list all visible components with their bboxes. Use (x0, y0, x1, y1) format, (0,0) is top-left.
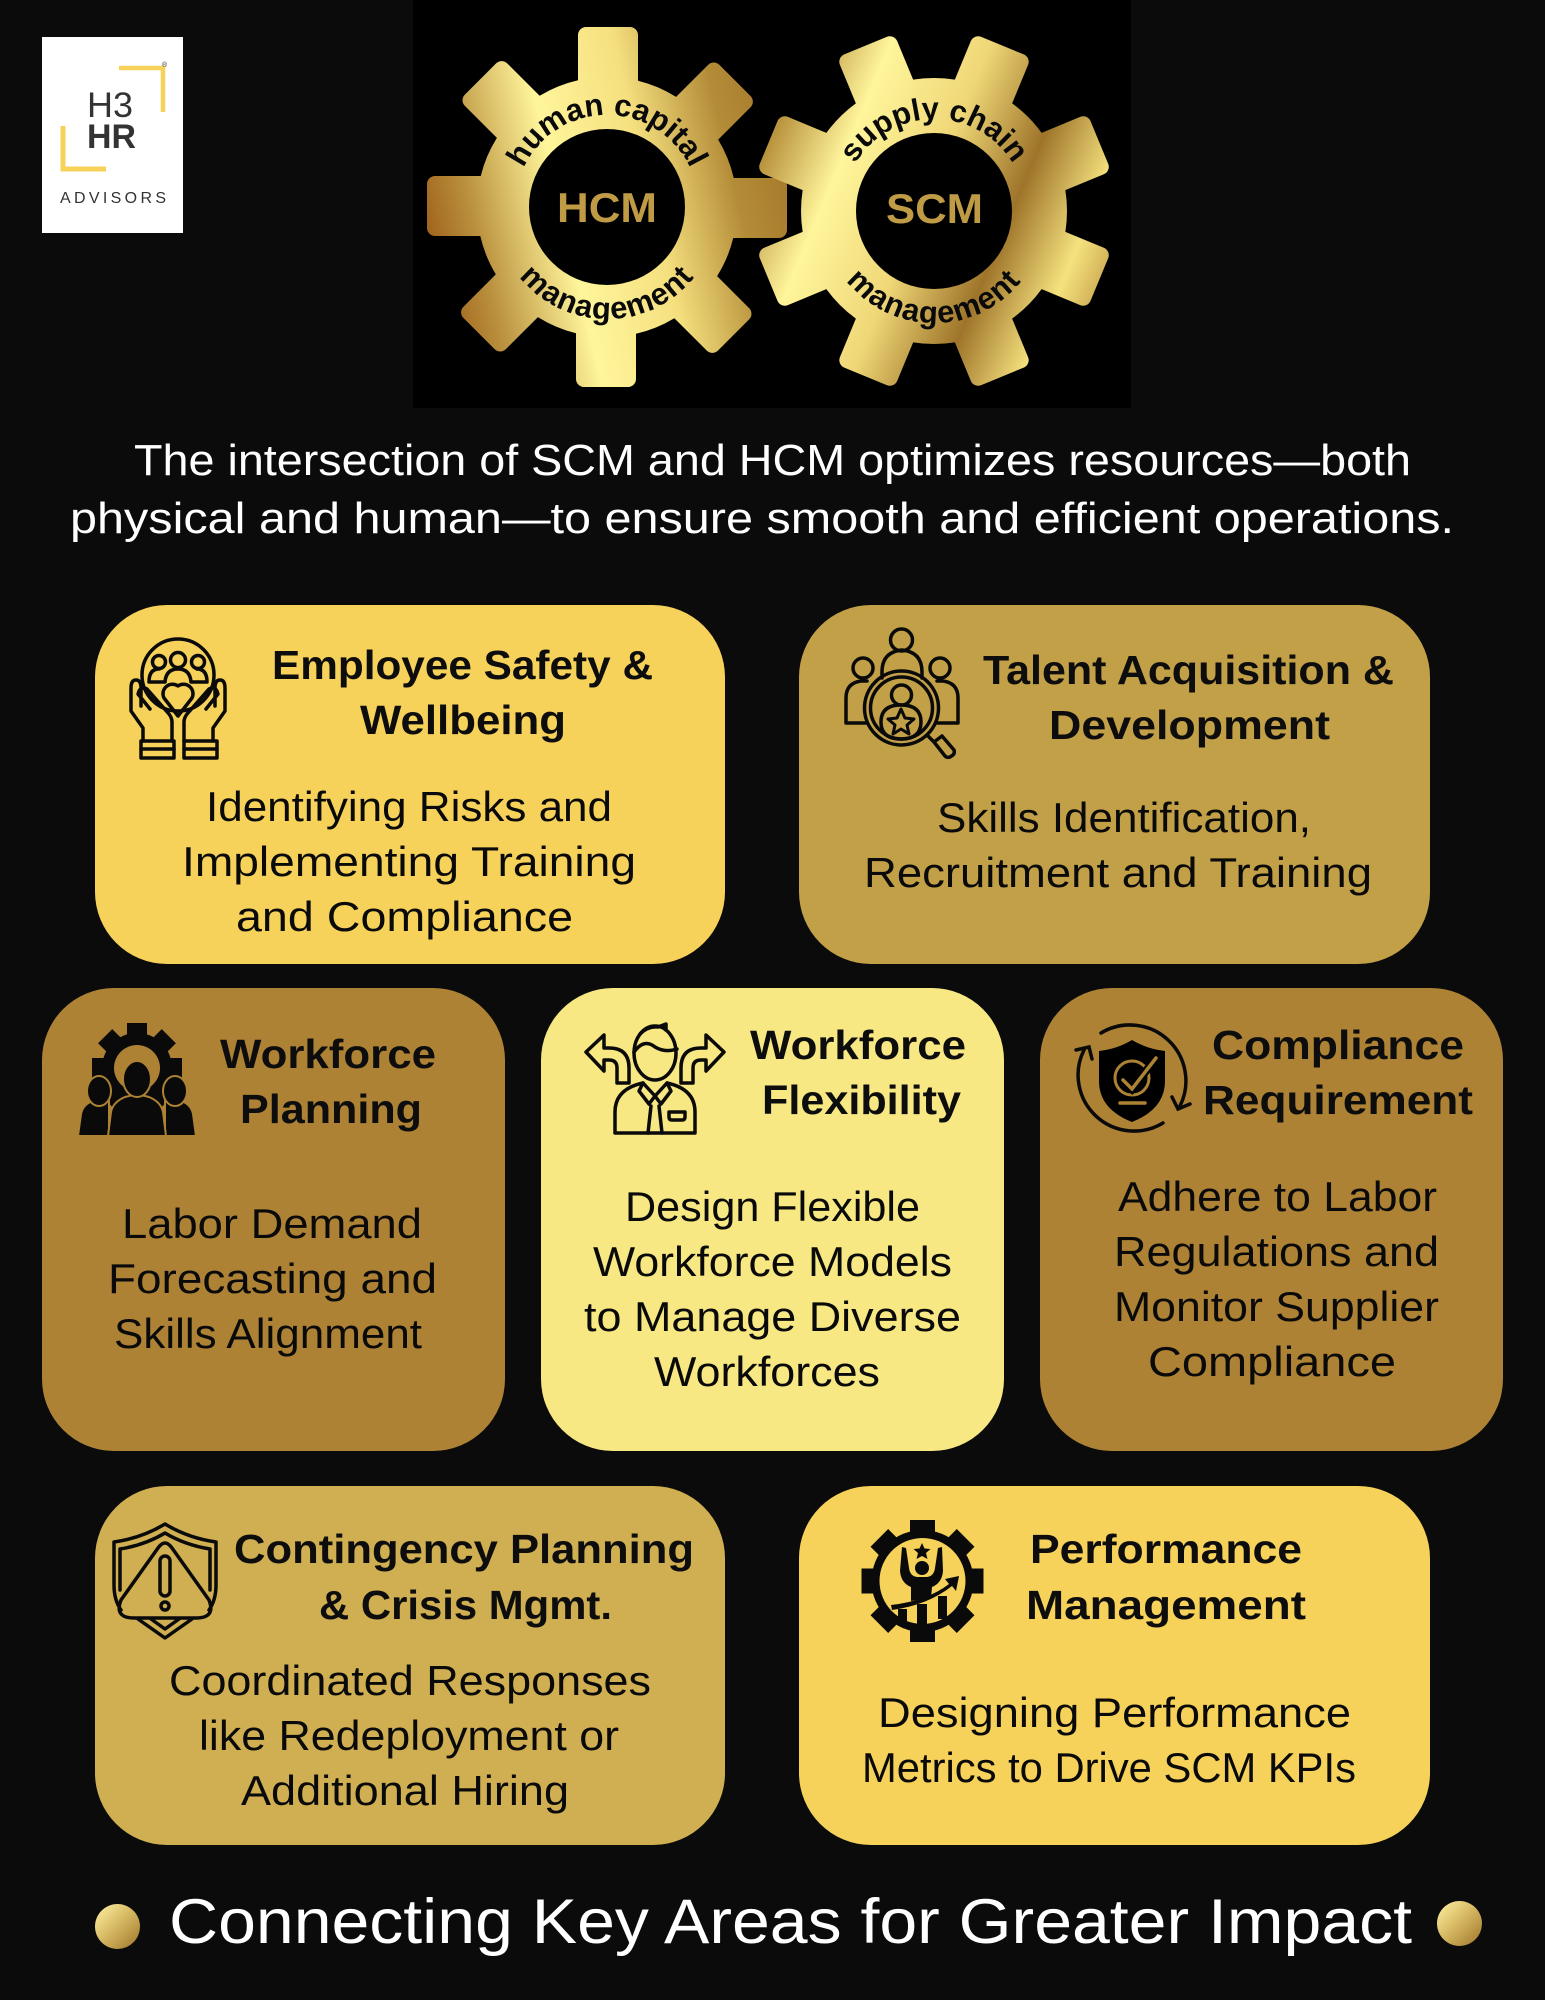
heading: Flexibility (762, 1077, 961, 1123)
description: and Compliance (236, 893, 573, 940)
panel: workforce planning (42, 988, 505, 1451)
icon: right gold dot (1437, 1901, 1482, 1946)
icon: person with diverging arrows (586, 1024, 724, 1133)
gear: human capital management: human capital (505, 98, 710, 166)
heading: Employee Safety & (272, 642, 653, 688)
description (108, 1200, 437, 1357)
panel: contingency planning and crisis management (95, 1486, 725, 1845)
heading: & Crisis Mgmt. (319, 1582, 612, 1628)
description: Adhere to Labor (1118, 1173, 1437, 1220)
gear: supply chain management (759, 36, 1109, 386)
description: Workforce Models (593, 1238, 952, 1285)
logo: H3 HR Advisors: HR (87, 118, 136, 156)
panel: workforce flexibility (541, 988, 1004, 1451)
description (864, 794, 1372, 896)
description: to Manage Diverse (584, 1293, 961, 1340)
description: Compliance (1148, 1338, 1396, 1385)
icon: gear with achiever and growth chart (862, 1520, 984, 1642)
heading: Contingency Planning (234, 1526, 694, 1572)
heading (983, 647, 1394, 748)
intro text (70, 436, 1454, 543)
heading: Talent Acquisition & (983, 647, 1394, 693)
description (1114, 1173, 1439, 1385)
panel: talent acquisition and development (799, 605, 1430, 964)
logo: H3 HR Advisors: H3 (87, 86, 133, 125)
icon: shield with check and cycle arrows (1076, 1025, 1190, 1131)
gear: human capital management: management (520, 266, 694, 326)
gear: supply chain management: SCM (886, 185, 983, 232)
description (169, 1657, 651, 1814)
icon: hands holding people and heart (131, 639, 225, 758)
heading: Compliance (1212, 1022, 1464, 1068)
heading (1203, 1022, 1473, 1123)
hero panel: interlocking gears (413, 0, 1131, 408)
intro text: physical and human—to ensure smooth and efficient operations. (70, 494, 1454, 543)
gear: supply chain management: management (847, 270, 1021, 330)
heading: Development (1049, 702, 1330, 748)
description: Regulations and (1114, 1228, 1439, 1275)
description: Design Flexible (625, 1183, 920, 1230)
heading: Management (1026, 1582, 1306, 1628)
heading (1026, 1526, 1306, 1628)
description: Additional Hiring (241, 1767, 569, 1814)
description: Skills Alignment (114, 1310, 422, 1357)
description: Workforces (654, 1348, 880, 1395)
logo: H3 HR Advisors (42, 37, 183, 233)
description: Forecasting and (108, 1255, 437, 1302)
description: like Redeployment or (199, 1712, 619, 1759)
description: Monitor Supplier (1114, 1283, 1439, 1330)
description: Implementing Training (182, 838, 636, 885)
heading: Performance (1030, 1526, 1302, 1572)
icon: magnifier over people (846, 629, 958, 757)
heading (272, 642, 653, 743)
description: Skills Identification, (937, 794, 1311, 841)
description: Coordinated Responses (169, 1657, 651, 1704)
heading: Wellbeing (360, 697, 566, 743)
description (862, 1689, 1356, 1791)
logo: H3 HR Advisors: ® (162, 61, 168, 69)
description: Labor Demand (122, 1200, 422, 1247)
description (584, 1183, 961, 1395)
description: Metrics to Drive SCM KPIs (862, 1744, 1356, 1791)
heading: Requirement (1203, 1077, 1473, 1123)
description: Identifying Risks and (206, 783, 612, 830)
gear: supply chain management: supply chain (844, 98, 1024, 162)
description (182, 783, 636, 940)
icon: left gold dot (95, 1904, 140, 1949)
heading: Workforce (220, 1031, 436, 1077)
heading (750, 1022, 966, 1123)
footer tagline: Connecting Key Areas for Greater Impact (169, 1887, 1413, 1957)
panel: performance management (799, 1486, 1430, 1845)
heading: Planning (240, 1086, 422, 1132)
gear: human capital management: HCM (557, 184, 657, 231)
description: Recruitment and Training (864, 849, 1372, 896)
intro text: The intersection of SCM and HCM optimizes resources—both (134, 436, 1411, 485)
logo: H3 HR Advisors: ADVISORS (60, 190, 166, 207)
description: Designing Performance (878, 1689, 1351, 1736)
panel: compliance requirement (1040, 988, 1503, 1451)
icon: gear with team (78, 1023, 196, 1136)
gear: human capital management (427, 27, 787, 387)
heading (220, 1031, 436, 1132)
heading (234, 1526, 694, 1628)
heading: Workforce (750, 1022, 966, 1068)
panel: employee safety and wellbeing (95, 605, 725, 964)
icon: warning shield (114, 1524, 216, 1638)
